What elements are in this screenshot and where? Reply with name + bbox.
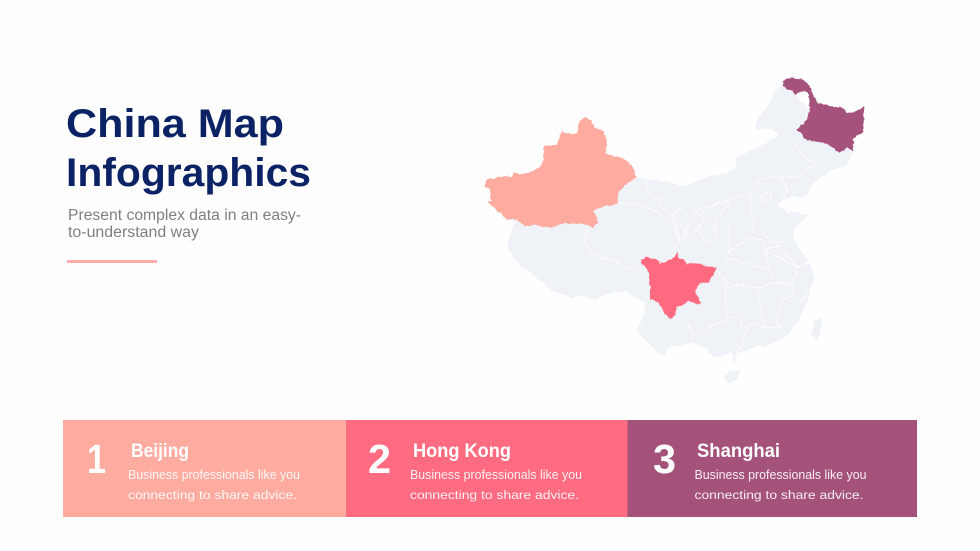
heading: Shanghai: Shanghai	[697, 441, 780, 462]
description	[410, 467, 582, 502]
map of China	[484, 77, 864, 383]
subtitle text: Present complex data in an easy-	[68, 207, 301, 224]
description	[128, 467, 300, 502]
heading: Beijing: Beijing	[131, 441, 189, 462]
number 3: 3	[653, 436, 676, 482]
region: Sichuan	[641, 252, 717, 319]
province borders	[585, 142, 817, 360]
subtitle text	[68, 207, 301, 241]
heading: Hong Kong: Hong Kong	[413, 441, 511, 462]
number 2: 2	[368, 436, 391, 482]
base map: mainland	[507, 83, 853, 364]
panel: Beijing	[63, 420, 346, 517]
title: Infographics	[66, 151, 311, 195]
title	[66, 102, 311, 195]
number 1: 1	[87, 436, 106, 482]
description: Business professionals like you	[694, 467, 866, 482]
region: Xinjiang	[484, 117, 637, 228]
title: China Map	[66, 102, 284, 146]
subtitle text: to-understand way	[68, 224, 199, 241]
panel: Hong Kong	[346, 420, 628, 517]
description: connecting to share advice.	[694, 488, 864, 502]
description: Business professionals like you	[128, 467, 300, 482]
panel: Shanghai	[628, 420, 917, 517]
description: connecting to share advice.	[410, 488, 579, 502]
base map: Hainan	[723, 370, 741, 383]
region: Heilongjiang	[783, 77, 864, 153]
description: connecting to share advice.	[128, 488, 297, 502]
base map: Taiwan	[811, 318, 822, 343]
accent line	[67, 260, 157, 263]
description: Business professionals like you	[410, 467, 582, 482]
description	[694, 467, 866, 502]
